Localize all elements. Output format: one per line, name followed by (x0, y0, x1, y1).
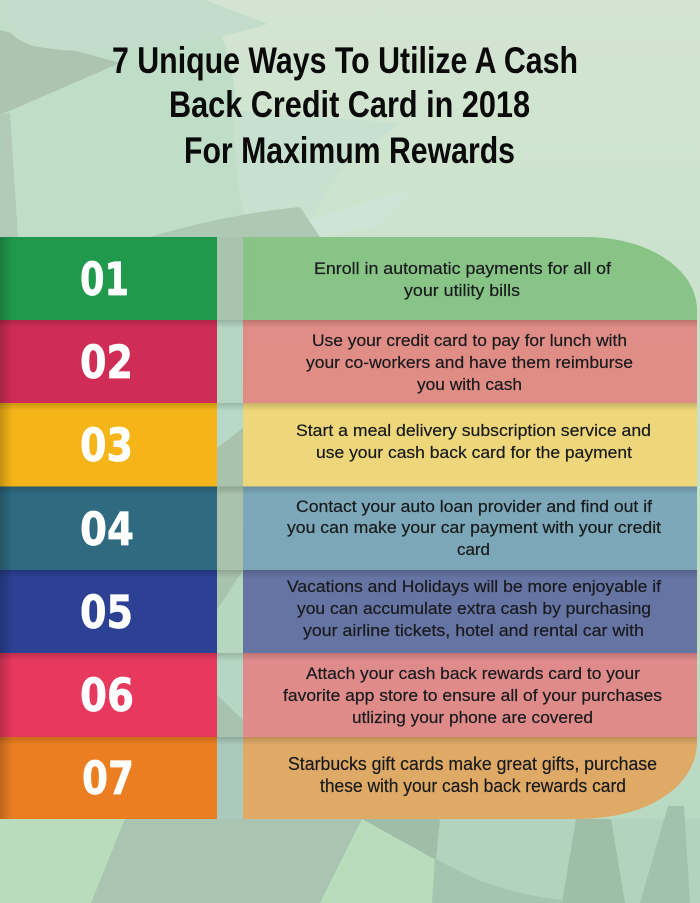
rounded text panel stack (243, 237, 697, 819)
text 07 (288, 754, 657, 796)
number 03: 03 (80, 419, 133, 472)
text 02: Use your credit card to pay for lunch with (312, 331, 627, 350)
text 06 (283, 664, 662, 727)
text 01: Enroll in automatic payments for all of (314, 259, 611, 278)
text 02: your co-workers and have them reimburse (306, 353, 633, 372)
number 04: 04 (80, 503, 134, 556)
row 07 (0, 737, 217, 819)
text 04: card (457, 540, 490, 559)
text 04: you can make your car payment with your credit (287, 518, 661, 537)
text 01: your utility bills (404, 281, 520, 300)
text 04 (287, 497, 661, 559)
text 03: Start a meal delivery subscription service and (296, 421, 651, 440)
row 04 (0, 486, 217, 570)
panel 03 background (243, 403, 697, 486)
number 06: 06 (80, 669, 134, 722)
text 02: you with cash (417, 375, 522, 394)
row top shadows (0, 237, 697, 819)
panel 04 background (243, 486, 697, 570)
text 06: utlizing your phone are covered (352, 708, 593, 727)
text 01 (314, 259, 611, 300)
text 05 (287, 577, 661, 640)
row 02 (0, 320, 217, 403)
panel 07 background (243, 737, 697, 819)
text 03: use your cash back card for the payment (316, 443, 632, 462)
number block 06 (0, 653, 217, 737)
text 03 (296, 421, 651, 462)
number block 04 (0, 486, 217, 570)
number block 05 (0, 570, 217, 653)
number 05: 05 (80, 586, 133, 639)
text 07: Starbucks gift cards make great gifts, purchase (288, 754, 657, 774)
number 07: 07 (82, 752, 134, 805)
row 05 (0, 570, 217, 653)
row 03 (0, 403, 217, 486)
text 04: Contact your auto loan provider and find out if (296, 497, 652, 516)
number block 01 (0, 237, 217, 320)
number block 03 (0, 403, 217, 486)
number 01: 01 (80, 253, 129, 306)
text 05: your airline tickets, hotel and rental car with (303, 621, 644, 640)
panel 01 background (243, 237, 697, 320)
row 06 (0, 653, 217, 737)
number 02: 02 (80, 336, 133, 389)
title: For Maximum Rewards (184, 130, 515, 171)
title (112, 40, 578, 171)
title: Back Credit Card in 2018 (169, 84, 530, 125)
text 05: you can accumulate extra cash by purchasing (297, 599, 651, 618)
text 02 (306, 331, 633, 394)
row 01 (0, 237, 217, 320)
text 06: Attach your cash back rewards card to your (306, 664, 640, 683)
text 05: Vacations and Holidays will be more enjoyable if (287, 577, 661, 596)
panel 06 background (243, 653, 697, 737)
text 07: these with your cash back rewards card (320, 776, 626, 796)
text 06: favorite app store to ensure all of your purchases (283, 686, 662, 705)
panel 05 background (243, 570, 697, 653)
panel 02 background (243, 320, 697, 403)
number block 02 (0, 320, 217, 403)
number block 07 (0, 737, 217, 819)
title: 7 Unique Ways To Utilize A Cash (112, 40, 578, 81)
